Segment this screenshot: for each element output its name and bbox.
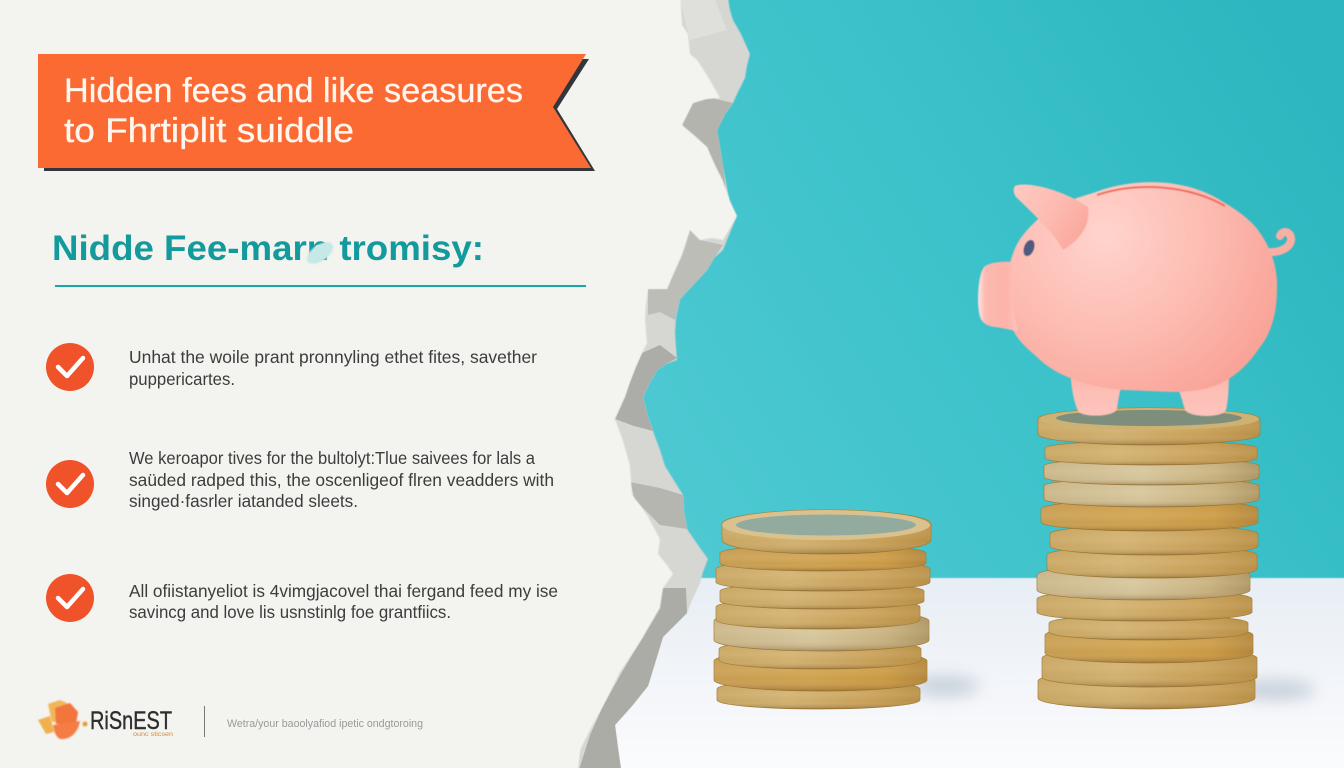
snout (978, 262, 1018, 331)
section heading (52, 229, 586, 287)
bullet 3 (46, 574, 558, 622)
bullet 2 (46, 448, 554, 511)
coin slot (1097, 187, 1225, 206)
coin shadows (911, 676, 1315, 700)
bullet 2: singed·fasrler iatanded sleets. (129, 491, 358, 511)
footer (38, 700, 423, 739)
tail (1268, 232, 1291, 252)
bullet 2: saüded radped this, the oscenligeof flren veadders with (129, 470, 554, 490)
title banner (38, 54, 595, 171)
bullet list (46, 343, 558, 622)
paper sheet (0, 0, 737, 768)
teal backdrop (600, 0, 1344, 582)
top coin face (722, 510, 930, 540)
coin stack: short (714, 510, 931, 709)
bullet 1 (46, 343, 537, 391)
top coin face (1039, 408, 1259, 430)
legs (1070, 368, 1125, 416)
smudge mark (303, 238, 337, 268)
title banner: to Fhrtiplit suiddle (64, 112, 354, 150)
banner title: Hidden fees and like seasures (64, 72, 523, 110)
footer tagline: Wetra/your baoolyafiod ipetic ondgtoroing (227, 718, 423, 730)
section heading: Nidde Fee-marn tromisy: (52, 229, 484, 268)
bullet 3: All ofiistanyeliot is 4vimgjacovel thai fergand feed my ise (129, 581, 558, 601)
body (1008, 182, 1277, 392)
ear (1014, 185, 1088, 250)
torn paper edge (0, 0, 750, 768)
piggy bank (978, 182, 1291, 416)
logo icon (38, 700, 88, 739)
bullet 3: savincg and love lis usnstinlg foe grantfiics. (129, 602, 451, 622)
bullet 2: We keroapor tives for the bultolyt:Tlue saivees for lals a (129, 448, 535, 468)
banner shadow (44, 59, 595, 171)
white table surface (560, 578, 1344, 768)
eye (1021, 238, 1037, 258)
bullet 1: puppericartes. (129, 369, 235, 389)
banner ribbon (38, 54, 591, 168)
logo wordmark: RiSnEST (90, 707, 172, 735)
torn edge base (577, 0, 750, 768)
bullet 1: Unhat the woile prant pronnyling ethet fites, savether (129, 347, 537, 367)
coin stack: tall (1037, 408, 1260, 709)
logo subtitle: ounc sticsen (133, 732, 173, 738)
footer divider (204, 706, 205, 737)
